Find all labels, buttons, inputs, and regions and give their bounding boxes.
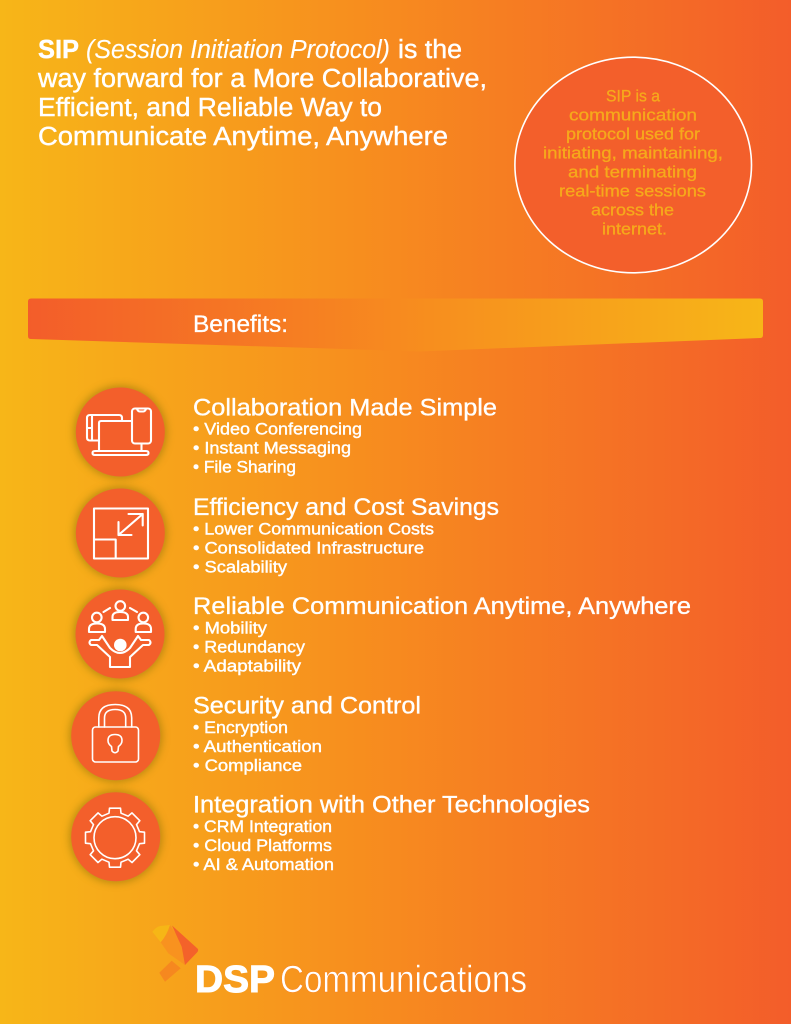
callout: SIP definition: real-time sessions [559,182,706,200]
benefit: reliable communication: • Adaptability [193,658,302,676]
icon: people network [74,588,166,680]
callout: SIP definition: communication [569,106,697,124]
title: is the [398,36,462,64]
benefit: security [70,690,421,781]
title: (Session Initiation Protocol) [86,36,390,64]
benefit: security: • Encryption [193,719,288,737]
icon: scale arrows [75,488,166,578]
benefit: reliable communication: • Redundancy [193,638,306,656]
logo: DSP Communications: DSP [195,959,275,1001]
callout: SIP definition: internet. [602,220,667,238]
title [37,36,487,151]
callout: SIP definition: and terminating [568,164,697,182]
benefit: efficiency: • Consolidated Infrastructure [193,540,424,558]
callout: SIP definition: protocol used for [566,126,701,144]
benefit: integration: • CRM Integration [193,818,332,836]
benefit: reliable communication: Reliable Communication Anytime, Anywhere [193,593,691,620]
benefit: security: • Compliance [193,757,302,775]
title: SIP [38,36,79,64]
benefit: reliable communication: • Mobility [193,620,268,638]
benefit: collaboration: Collaboration Made Simple [193,394,497,422]
logo: DSP Communications [152,925,527,1001]
icon: gear [70,791,161,882]
benefit: efficiency [75,488,499,578]
callout: SIP definition: across the [591,202,674,220]
benefit: security: • Authentication [193,738,322,756]
benefit: integration: Integration with Other Technologies [193,792,590,818]
icon: padlock [70,690,161,781]
icon: devices [75,386,166,478]
callout: SIP definition: initiating, maintaining, [543,144,723,162]
title: Efficient, and Reliable Way to [38,94,382,122]
benefit: collaboration [75,386,497,478]
callout: SIP definition: SIP is a [606,88,661,106]
benefit: reliable communication [74,588,691,680]
benefit: efficiency: • Lower Communication Costs [193,520,434,538]
callout: SIP definition [515,57,752,273]
title: Communicate Anytime, Anywhere [38,123,448,151]
benefit: integration: • AI & Automation [193,856,334,874]
banner: benefits: Benefits: [193,311,288,338]
benefit: security: Security and Control [193,692,421,720]
banner: benefits [28,298,763,352]
benefit: integration: • Cloud Platforms [193,837,332,855]
icon: logo mark [152,925,198,982]
logo: DSP Communications: Communications [280,959,527,1001]
benefit: collaboration: • File Sharing [193,458,296,476]
benefit: efficiency: • Scalability [193,558,288,576]
benefit: efficiency: Efficiency and Cost Savings [193,494,499,521]
benefit: integration [70,791,590,882]
benefit: collaboration: • Instant Messaging [193,440,351,458]
title: way forward for a More Collaborative, [37,65,487,93]
benefit: collaboration: • Video Conferencing [193,420,362,438]
